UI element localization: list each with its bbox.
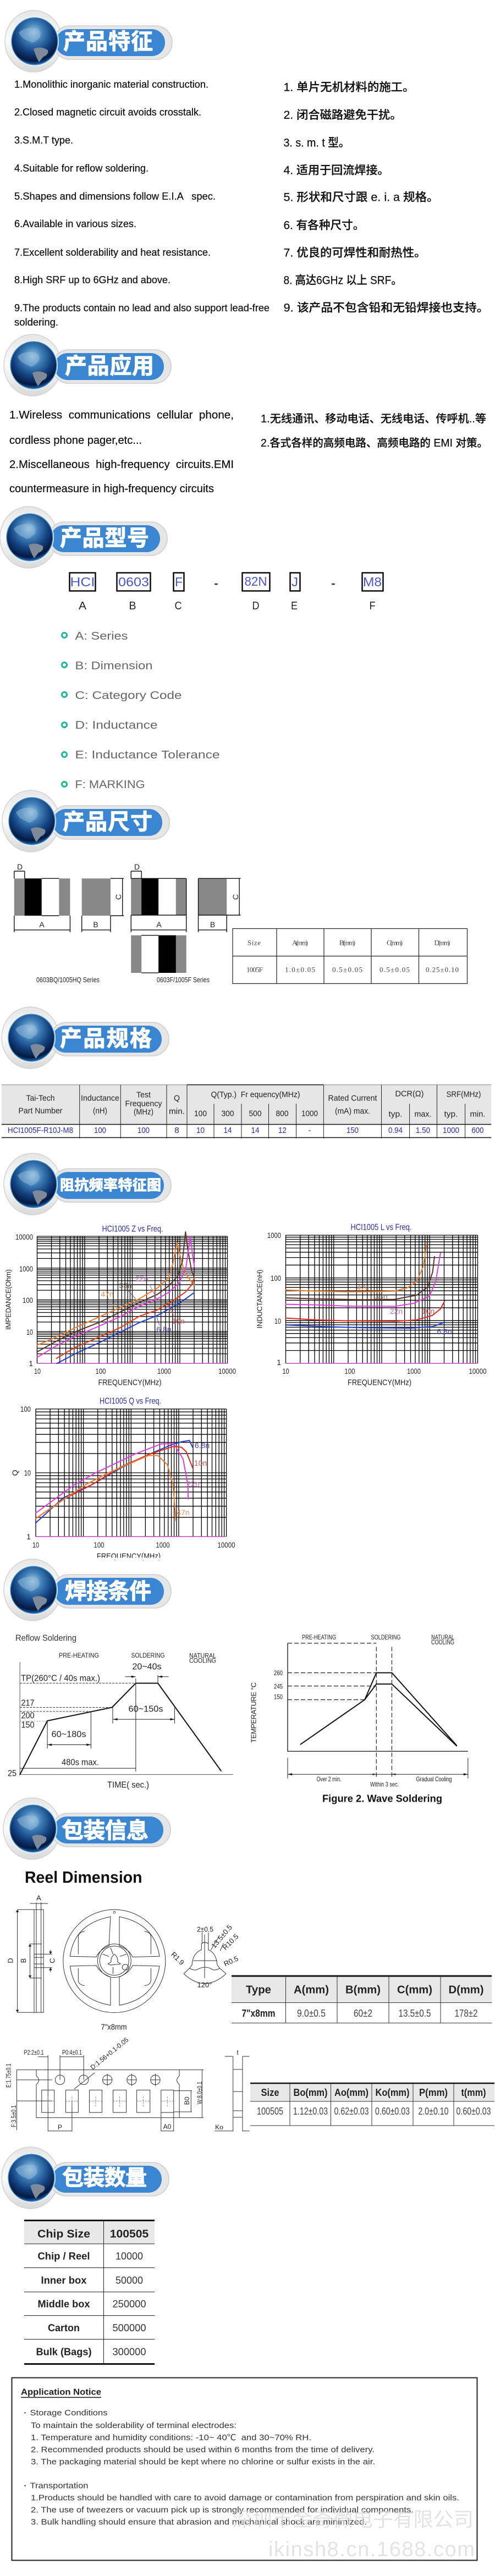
text block: features in Chinese: 8. 高达6GHz 以上 SRF。 <box>284 274 402 287</box>
chart: Q vs frequency <box>0 1397 495 1561</box>
table: electrical specifications: 12 <box>278 1126 287 1135</box>
diagram: carrier tape: t <box>237 2049 239 2056</box>
panel: application notice: 3. Bulk handling should ensure that abrasion and mechanical shock are minimized. <box>31 2518 367 2527</box>
chart: Z vs frequency: 100 <box>96 1367 106 1375</box>
diagram: chip outlines: D <box>134 862 140 871</box>
chart: Q vs frequency: 1000 <box>156 1540 170 1549</box>
chart: Z vs frequency: 10 <box>26 1328 33 1336</box>
table: electrical specifications: (nH) <box>93 1107 107 1115</box>
chart: Z vs frequency: HCI1005 Z vs Freq. <box>102 1224 163 1234</box>
chart: L vs frequency: 10 <box>283 1367 289 1375</box>
diagram: reel: D <box>7 1958 14 1963</box>
chart: Z vs frequency: 33n <box>119 1281 132 1290</box>
table: electrical specifications: - <box>308 1126 311 1135</box>
heading: product dimensions: 产品尺寸 <box>63 810 152 834</box>
chart: L vs frequency: HCI1005 L vs Freq. <box>351 1223 411 1232</box>
chart: L vs frequency: 100 <box>271 1274 281 1283</box>
text block: features in English: 3.S.M.T type. <box>14 135 73 146</box>
table: dimensions: 1005F <box>246 966 263 973</box>
watermark <box>232 2508 475 2561</box>
chart: Z vs frequency: FREQUENCY(MHz) <box>98 1378 162 1387</box>
chart: L vs frequency: INDUCTANCE(nH) <box>255 1269 264 1329</box>
table: electrical specifications: 1000 <box>301 1109 318 1119</box>
chart: wave soldering profile: Figure 2. Wave Soldering <box>322 1793 442 1804</box>
chart: Z vs frequency: 10 <box>34 1367 41 1375</box>
table: electrical specifications: 600 <box>472 1126 484 1135</box>
heading: packaging quantity: 包装数量 <box>62 2167 147 2190</box>
table: electrical specifications: typ. <box>388 1110 403 1119</box>
chart: wave soldering profile: NATURAL <box>431 1633 454 1641</box>
chart: reflow soldering profile: PRE-HEATING <box>59 1652 99 1659</box>
text block: features in English: 7.Excellent solderability and heat resistance. <box>14 247 211 258</box>
legend list: part number fields: C: Category Code <box>75 690 182 702</box>
part number breakdown: - <box>214 576 218 590</box>
chart: wave soldering profile: Over 2 min. <box>317 1775 341 1783</box>
table: electrical specifications: Frequency <box>125 1099 162 1109</box>
table: electrical specifications: 300 <box>221 1109 234 1119</box>
text block: features in Chinese: 9. 该产品不包含铅和无铅焊接也支持。 <box>284 301 488 315</box>
heading: product features <box>5 10 172 72</box>
part number breakdown: C <box>175 600 182 612</box>
chart: Q vs frequency: 1 <box>26 1532 31 1541</box>
table: reel dimensions: 178±2 <box>454 2008 477 2019</box>
chart: reflow soldering profile: Reflow Soldering <box>15 1633 76 1643</box>
legend list: part number fields: E: Inductance Tolerance <box>75 749 220 761</box>
table: electrical specifications: 150 <box>346 1126 359 1135</box>
chart: Z vs frequency: 10000 <box>15 1232 33 1241</box>
text block: features in English: 1.Monolithic inorganic material construction. <box>14 79 208 90</box>
text block: features in Chinese: 4. 适用于回流焊接。 <box>284 164 389 177</box>
table: packaging quantity: 500000 <box>112 2322 146 2333</box>
heading: soldering conditions <box>4 1559 171 1621</box>
panel: application notice: 3. The packaging material should be kept where no chlorine or sulfur exists in the air. <box>31 2457 375 2467</box>
text block: features in Chinese: 7. 优良的可焊性和耐热性。 <box>284 246 426 260</box>
chart: reflow soldering profile: 200 <box>21 1711 35 1720</box>
text block: features in English: 9.The products contain no lead and also support lead-free <box>14 302 270 313</box>
chart: L vs frequency: 100 <box>344 1367 355 1375</box>
diagram: carrier tape: W:8.0±0.1 <box>196 2082 204 2104</box>
panel: application notice: 1.Products should be handled with care to avoid damage or contamination from perspiration and skin oils. <box>31 2494 459 2502</box>
heading: product model: 产品型号 <box>60 526 149 551</box>
diagram: carrier tape: E:1.75±0.1 <box>4 2063 12 2088</box>
table: packaging quantity: Chip / Reel <box>37 2250 90 2261</box>
text block: features in English: 2.Closed magnetic circuit avoids crosstalk. <box>14 107 201 118</box>
chart: wave soldering profile: PRE-HEATING <box>302 1633 336 1641</box>
table: dimensions <box>233 928 468 983</box>
table: electrical specifications: Tai-Tech <box>26 1093 55 1103</box>
table: electrical specifications: max. <box>415 1110 431 1119</box>
chart: wave soldering profile: Gradual Cooling <box>416 1775 452 1783</box>
part number breakdown: F <box>175 575 183 589</box>
legend list: part number fields: A: Series <box>75 630 128 642</box>
table: reel dimensions: A(mm) <box>294 1984 329 1996</box>
chart: L vs frequency: 1000 <box>267 1231 281 1240</box>
text block: applications in Chinese <box>261 412 488 449</box>
diagram: chip outlines: C <box>114 894 123 900</box>
diagram: chip outlines <box>14 862 240 984</box>
table: electrical specifications: 8 <box>174 1126 179 1135</box>
table: tape dimensions: Size <box>261 2087 279 2098</box>
part number breakdown: A <box>79 600 87 612</box>
heading: impedance frequency characteristics <box>4 1153 171 1215</box>
table: reel dimensions: C(mm) <box>397 1984 432 1996</box>
part number breakdown <box>69 573 383 612</box>
text block: features in English: soldering. <box>14 317 58 328</box>
diagram: reel: 13.5±0.5 <box>210 1923 234 1950</box>
text block: applications in Chinese: 1.无线通讯、移动电话、无线电话、传呼机..等 <box>261 412 486 425</box>
heading: product applications <box>4 334 171 396</box>
part number breakdown: B <box>129 600 136 612</box>
chart: reflow soldering profile: NATURAL <box>189 1652 216 1660</box>
table: electrical specifications: Part Number <box>19 1107 63 1115</box>
table: tape dimensions: Ao(mm) <box>334 2087 369 2098</box>
chart: Z vs frequency: 10n <box>172 1317 185 1325</box>
text block: features in English <box>14 79 270 328</box>
diagram: carrier tape: P2:2±0.1 <box>24 2049 44 2056</box>
panel: application notice: 2. Recommended products should be used within 6 months from the time of delivery. <box>31 2445 375 2454</box>
table: dimensions: B(mm) <box>339 938 355 947</box>
table: electrical specifications: 500 <box>249 1109 262 1119</box>
diagram: carrier tape: P0:4±0.1 <box>62 2049 82 2056</box>
chart: Q vs frequency: 6.8n <box>195 1441 210 1450</box>
diagram: reel: 7"x8mm <box>101 2023 127 2032</box>
chart: reflow soldering profile: 60~180s <box>52 1730 86 1739</box>
heading: product specifications <box>2 1007 169 1069</box>
table: reel dimensions: B(mm) <box>345 1984 381 1996</box>
table: packaging quantity: Carton <box>48 2322 80 2333</box>
part number breakdown: M8 <box>363 575 382 589</box>
diagram: reel: 2±0.5 <box>197 1925 213 1934</box>
table: packaging quantity: 10000 <box>116 2250 143 2261</box>
diagram: carrier tape <box>4 2036 250 2132</box>
panel: application notice: Transportation <box>30 2481 88 2490</box>
text block: applications in English: 2.Miscellaneous high-frequency circuits.EMI <box>9 459 234 471</box>
chart: reflow soldering profile: 25 <box>8 1769 16 1779</box>
table: packaging quantity: 100505 <box>110 2228 148 2241</box>
table: packaging quantity: Middle box <box>37 2299 90 2310</box>
table: dimensions: C(mm) <box>387 938 403 947</box>
chart: Z vs frequency <box>4 1224 236 1387</box>
text block: applications in Chinese: 2.各式各样的高频电路、高频电路的 EMI 对策。 <box>261 437 488 449</box>
chart: Z vs frequency: IMPEDANCE(Ohm) <box>4 1269 12 1330</box>
diagram: reel: B <box>19 1958 28 1963</box>
chart: reflow soldering profile: 480s max. <box>62 1758 99 1768</box>
table: packaging quantity: Bulk (Bags) <box>36 2346 92 2357</box>
table: reel dimensions: 7"x8mm <box>242 2008 275 2019</box>
part number breakdown: D <box>252 600 260 612</box>
chart: Q vs frequency: Q <box>10 1469 19 1476</box>
chart: Z vs frequency: 1000 <box>157 1367 171 1375</box>
chart: wave soldering profile <box>250 1633 468 1804</box>
table: electrical specifications: 0.94 <box>388 1126 403 1135</box>
text block: features in Chinese: 3. s. m. t 型。 <box>284 136 350 150</box>
table: electrical specifications: 100 <box>94 1126 106 1135</box>
table: electrical specifications: 100 <box>194 1109 207 1119</box>
table: dimensions: 0.5±0.05 <box>332 966 362 973</box>
table: electrical specifications: 1000 <box>443 1126 459 1135</box>
chart: reflow soldering profile <box>8 1633 233 1790</box>
table: electrical specifications: SRF(MHz) <box>447 1090 481 1099</box>
subheading: reel dimension: Reel Dimension <box>25 1869 142 1886</box>
chart: Z vs frequency: 100 <box>23 1296 33 1304</box>
text block: features in English: 8.High SRF up to 6GHz and above. <box>14 274 170 285</box>
chart: Q vs frequency: 10 <box>32 1540 39 1549</box>
chart: reflow soldering profile: TP(260°C / 40s max.) <box>21 1674 100 1683</box>
diagram: chip outlines: 0603F/1005F Series <box>157 976 210 984</box>
heading: product features: 产品特征 <box>63 30 153 54</box>
table: reel dimensions <box>232 1976 492 2023</box>
text block: features in English: 6.Available in various sizes. <box>14 218 136 229</box>
table: electrical specifications: 10 <box>196 1126 205 1135</box>
chart: Q vs frequency: 10000 <box>218 1540 235 1549</box>
heading: impedance frequency characteristics: 阻抗频率特征图 <box>60 1177 161 1193</box>
part number breakdown: 0603 <box>118 575 149 589</box>
chart: wave soldering profile: Within 3 sec. <box>370 1781 399 1788</box>
chart: reflow soldering profile: 20~40s <box>132 1662 162 1672</box>
text block: features in English: 5.Shapes and dimensions follow E.I.A spec. <box>14 191 216 202</box>
text block: applications in English <box>9 409 234 495</box>
chart: wave soldering profile: TEMPERATURE °C <box>250 1682 257 1743</box>
table: tape dimensions <box>250 2083 494 2126</box>
table: dimensions: D(mm) <box>435 938 450 947</box>
table: reel dimensions: 60±2 <box>354 2008 372 2019</box>
chart: L vs frequency: 10000 <box>469 1367 487 1375</box>
chart: L vs frequency: 6.8n <box>437 1327 452 1336</box>
chart: Q vs frequency: 10 <box>24 1468 31 1477</box>
table: electrical specifications: Inductance <box>81 1093 119 1103</box>
chart: Z vs frequency: 6.8n <box>156 1325 172 1334</box>
table: electrical specifications: Rated Current <box>328 1093 377 1103</box>
table: packaging quantity <box>24 2221 155 2364</box>
table: tape dimensions: Bo(mm) <box>294 2087 328 2098</box>
table: electrical specifications: (mA) max. <box>335 1107 370 1116</box>
chart: wave soldering profile: 150 <box>274 1693 283 1700</box>
diagram: chip outlines: B <box>210 920 215 929</box>
chart: wave soldering profile: 245 <box>274 1683 283 1691</box>
table: packaging quantity: Inner box <box>41 2275 87 2286</box>
text block: features in Chinese <box>284 81 488 315</box>
table: electrical specifications <box>2 1085 491 1138</box>
text block: features in Chinese: 5. 形状和尺寸跟 e. i. a 规格。 <box>284 191 439 203</box>
diagram: carrier tape: D:1.56+0.1-0.05 <box>89 2036 130 2071</box>
panel: application notice: To maintain the solderability of terminal electrodes: <box>31 2421 237 2430</box>
table: packaging quantity: 250000 <box>112 2299 146 2310</box>
heading: packaging information: 包装信息 <box>62 1819 148 1843</box>
heading: packaging quantity <box>2 2147 169 2209</box>
chart: Z vs frequency: 47n <box>101 1290 114 1298</box>
chart: L vs frequency: 1000 <box>407 1367 421 1375</box>
chart: L vs frequency: 10n <box>422 1307 435 1315</box>
diagram: chip outlines: C <box>231 894 240 900</box>
chart: Q vs frequency: 47n <box>177 1508 190 1517</box>
heading: product model <box>0 507 167 568</box>
table: electrical specifications: 1.50 <box>416 1126 430 1135</box>
panel: application notice: Application Notice <box>21 2388 101 2397</box>
table: dimensions: 0.5±0.05 <box>380 966 410 973</box>
diagram: carrier tape: B0 <box>183 2096 191 2105</box>
chart: Q vs frequency: HCI1005 Q vs Freq. <box>100 1397 161 1406</box>
chart: wave soldering profile: COOLING <box>431 1638 454 1646</box>
diagram: chip outlines: A <box>39 920 45 929</box>
heading: product specifications: 产品规格 <box>60 1027 152 1051</box>
chart: L vs frequency: 22n <box>390 1307 403 1315</box>
chart: L vs frequency: 10 <box>274 1317 281 1325</box>
diagram: carrier tape: A0 <box>163 2123 172 2131</box>
diagram: chip outlines: B <box>93 920 98 929</box>
table: tape dimensions: 0.60±0.03 <box>375 2106 410 2117</box>
table: dimensions: Size <box>248 938 261 947</box>
part number breakdown: - <box>331 576 336 590</box>
table: tape dimensions: 1.12±0.03 <box>293 2106 328 2117</box>
text block: applications in English: 1.Wireless communications cellular phone, <box>9 409 234 421</box>
text block: features in Chinese: 2. 闭合磁路避免干扰。 <box>284 109 402 122</box>
chart: Z vs frequency: 10000 <box>218 1367 236 1375</box>
table: tape dimensions: t(mm) <box>461 2087 486 2098</box>
table: electrical specifications: HCI1005F-R10J-M8 <box>8 1126 73 1135</box>
panel: application notice: 2. The use of tweezers or vacuum pick up is strongly recommended for individual components. <box>31 2506 414 2514</box>
chart: L vs frequency: 1 <box>277 1358 281 1367</box>
table: tape dimensions: P(mm) <box>419 2087 448 2098</box>
heading: product applications: 产品应用 <box>65 354 154 378</box>
legend list: part number fields <box>62 630 220 791</box>
diagram: reel <box>7 1894 240 2032</box>
legend list: part number fields: F: MARKING <box>75 779 145 791</box>
diagram: chip outlines: 0603BQ/1005HQ Series <box>36 976 100 984</box>
chart: wave soldering profile: 260 <box>274 1669 283 1677</box>
diagram: chip outlines: D <box>17 862 23 871</box>
heading: soldering conditions: 焊接条件 <box>65 1579 151 1604</box>
text block: features in Chinese: 1. 单片无机材料的施工。 <box>284 81 415 93</box>
chart: reflow soldering profile: TIME( sec.) <box>107 1781 149 1790</box>
chart: Z vs frequency: 22n <box>135 1274 148 1283</box>
watermark: 深圳市金奇微电子有限公司 <box>232 2508 474 2531</box>
part number breakdown: J <box>292 575 298 589</box>
diagram: reel: 120° <box>197 1981 212 1989</box>
table: electrical specifications: Test <box>136 1090 151 1100</box>
table: electrical specifications: (MHz) <box>134 1108 153 1116</box>
chart: reflow soldering profile: SOLDERING <box>131 1652 165 1659</box>
table: tape dimensions: 2.0±0.10 <box>418 2106 449 2117</box>
diagram: reel: A <box>36 1894 41 1902</box>
heading: packaging information <box>3 1798 170 1859</box>
table: electrical specifications: 14 <box>223 1126 232 1135</box>
text block: features in Chinese: 6. 有各种尺寸。 <box>284 219 364 232</box>
part number breakdown: HCI <box>70 575 95 589</box>
chart: Q vs frequency: 10n <box>194 1458 207 1467</box>
chart: L vs frequency: FREQUENCY(MHz) <box>348 1378 411 1387</box>
table: tape dimensions: 0.62±0.03 <box>334 2106 369 2117</box>
chart: Q vs frequency: 22n <box>186 1479 200 1488</box>
table: dimensions: 1.0±0.05 <box>285 966 315 973</box>
table: electrical specifications: Q(Typ.) Fr equency(MHz) <box>211 1090 300 1099</box>
part number breakdown: F <box>370 600 375 612</box>
table: electrical specifications: min. <box>470 1110 485 1119</box>
table: electrical specifications: DCR(Ω) <box>395 1089 424 1099</box>
chart: reflow soldering profile: 217 <box>21 1698 35 1708</box>
panel: application notice: 1. Temperature and humidity conditions: -10~ 40℃ and 30~70% RH. <box>31 2433 311 2442</box>
diagram: chip outlines: A <box>156 920 162 929</box>
text block: applications in English: countermeasure in high-frequency circuits <box>9 483 214 495</box>
table: electrical specifications: 800 <box>276 1109 288 1119</box>
text block: applications in English: cordless phone pager,etc... <box>9 434 142 447</box>
chart: Q vs frequency: 100 <box>94 1540 105 1549</box>
table: electrical specifications: min. <box>169 1107 185 1116</box>
chart: reflow soldering profile: 150 <box>21 1720 35 1730</box>
diagram: reel: R1.9 <box>169 1950 186 1967</box>
legend list: part number fields: B: Dimension <box>75 660 153 672</box>
table: reel dimensions: Type <box>246 1984 271 1996</box>
table: electrical specifications: 100 <box>138 1126 150 1135</box>
table: tape dimensions: Ko(mm) <box>375 2087 409 2098</box>
table: dimensions: 0.25±0.10 <box>426 966 459 973</box>
table: packaging quantity: 50000 <box>116 2275 143 2286</box>
chart: reflow soldering profile: 60~150s <box>129 1705 163 1714</box>
diagram: reel: R0.5 <box>222 1954 240 1968</box>
chart: Z vs frequency: 1000 <box>19 1264 33 1273</box>
table: reel dimensions: D(mm) <box>449 1984 484 1996</box>
chart: L vs frequency: 33n <box>375 1292 388 1301</box>
table: electrical specifications: 14 <box>251 1126 260 1135</box>
chart: Q vs frequency: 100 <box>20 1405 31 1413</box>
part number breakdown: 82N <box>244 574 267 588</box>
chart: L vs frequency: 47n <box>356 1283 370 1292</box>
chart: Q vs frequency: FREQUENCY(MHz) <box>97 1552 161 1561</box>
table: electrical specifications: Q <box>174 1093 180 1103</box>
diagram: carrier tape: P <box>58 2123 62 2131</box>
chart: L vs frequency <box>255 1223 487 1387</box>
diagram: carrier tape: Ko <box>215 2123 223 2131</box>
panel: application notice: Storage Conditions <box>30 2408 108 2418</box>
table: packaging quantity: Chip Size <box>37 2228 90 2241</box>
text block: features in English: 4.Suitable for reflow soldering. <box>14 163 148 174</box>
panel: application notice: • <box>24 2483 26 2489</box>
table: dimensions: A(mm) <box>292 938 308 947</box>
chart: wave soldering profile: SOLDERING <box>371 1633 400 1641</box>
diagram: carrier tape: F:3.5±0.1 <box>10 2105 18 2127</box>
table: tape dimensions: 100505 <box>257 2106 283 2117</box>
table: reel dimensions: 13.5±0.5 <box>398 2008 431 2019</box>
heading: product dimensions <box>2 790 169 852</box>
table: reel dimensions: 9.0±0.5 <box>297 2008 326 2019</box>
chart: Z vs frequency: 1 <box>29 1359 33 1368</box>
table: packaging quantity: 300000 <box>112 2346 146 2357</box>
chart: reflow soldering profile: COOLING <box>189 1656 216 1664</box>
table: electrical specifications: typ. <box>444 1110 458 1119</box>
panel: application notice <box>12 2378 477 2561</box>
part number breakdown: E <box>291 600 298 612</box>
diagram: reel: R10.5 <box>221 1932 240 1952</box>
legend list: part number fields: D: Inductance <box>75 719 157 731</box>
panel: application notice: • <box>24 2410 26 2415</box>
watermark: ikinsh8.cn.1688.com <box>268 2538 475 2561</box>
diagram: reel: C <box>48 1958 56 1963</box>
